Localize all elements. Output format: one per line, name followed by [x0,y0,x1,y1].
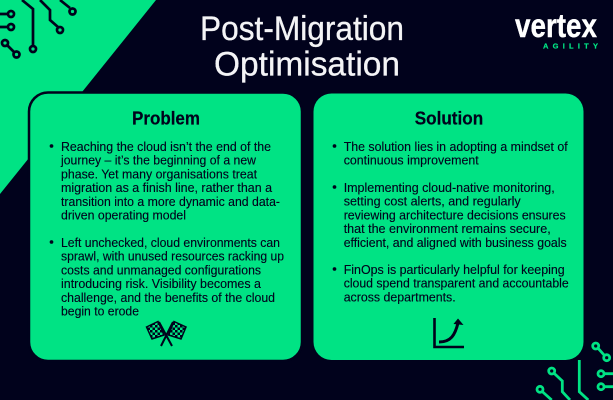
bullet text: solution second point: efficient, and aligned with business goals [344,236,567,250]
bullet text: solution second point: that the environment remains secure, [344,222,551,236]
decorative corner: green diagonal with circuit traces [0,0,156,194]
bullet text: solution second point [333,181,567,250]
bullet text: problem second point: sprawl, with unused resources racking up [61,250,284,264]
bullet text: problem first point: phase. Yet many organisations treat [61,167,257,181]
bullet text: solution third point: FinOps is particularly helpful for keeping [344,263,565,277]
heading: problem: Problem [132,108,200,128]
bullet text: problem second point: Left unchecked, cloud environments can [61,236,280,250]
bullet text: solution third point [333,263,569,304]
bullet text: solution first point [333,140,568,168]
decorative corner: green circuit traces [537,343,613,400]
bullet text: problem second point [50,236,284,318]
title [200,10,404,84]
title: Post-Migration [200,10,404,48]
panel: problem [29,92,302,361]
logo: Vertex Agility: AGILITY [543,42,598,50]
icon: chequered flags [146,322,186,346]
bullet text: problem second point: introducing risk. Visibility becomes a [61,277,261,291]
bullet text: solution first point: The solution lies in adopting a mindset of [344,140,568,154]
heading: solution: Solution [415,108,483,128]
bullet text: problem second point: begin to erode [61,304,139,318]
bullet text: problem first point [50,140,280,222]
bullet text: solution first point: continuous improvement [344,154,479,168]
bullet text: solution second point: setting cost alerts, and regularly [344,195,521,209]
bullet text: solution second point: Implementing cloud-native monitoring, [344,181,555,195]
bullet text: solution third point: across departments. [344,290,456,304]
logo: Vertex Agility: vertex [515,7,598,44]
bullet text: problem first point: transition into a more dynamic and data- [61,195,280,209]
panel: solution [314,94,584,360]
title: Optimisation [214,46,400,84]
bullet text: solution second point: reviewing architecture decisions ensures [344,208,566,222]
bullet text: problem first point: driven operating model [61,208,186,222]
bullet text: problem first point: journey – it’s the beginning of a new [60,154,257,168]
bullet text: problem second point: costs and unmanaged configurations [61,263,261,277]
bullet text: problem first point: Reaching the cloud isn’t the end of the [61,140,271,154]
bullet text: solution third point: cloud spend transparent and accountable [344,277,569,291]
bullet text: problem first point: migration as a finish line, rather than a [61,181,272,195]
bullet text: problem second point: challenge, and the benefits of the cloud [61,291,275,305]
icon: growth chart [434,318,464,347]
